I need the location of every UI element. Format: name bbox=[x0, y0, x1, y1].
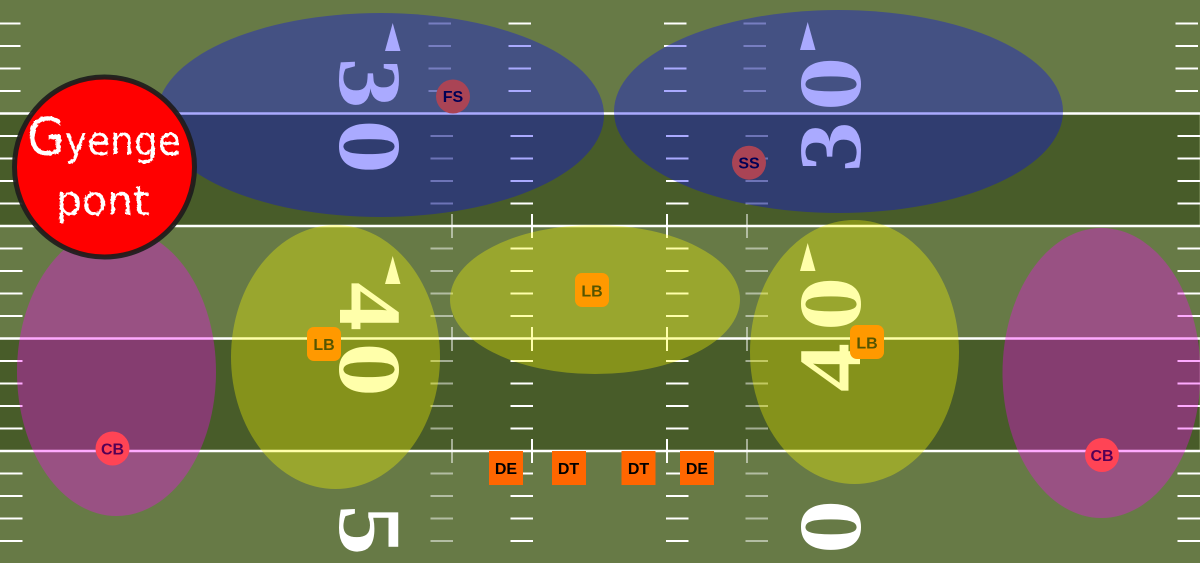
player: LB right bbox=[850, 325, 884, 359]
zone: hook middle bbox=[450, 225, 740, 374]
number: right 30: 3 bbox=[780, 122, 880, 172]
zone: hook left bbox=[231, 225, 440, 489]
player: DE left: DE bbox=[495, 461, 517, 478]
zone: deep left bbox=[157, 13, 604, 217]
zone: flat left bbox=[17, 228, 216, 516]
number: left 40 bbox=[320, 282, 418, 397]
player: LB right: LB bbox=[856, 336, 878, 352]
number: right 50: 0 bbox=[782, 500, 880, 554]
badge text bbox=[27, 107, 181, 225]
number: right 40: 4 bbox=[782, 343, 880, 392]
player: DT right: DT bbox=[628, 461, 649, 478]
player: CB left bbox=[96, 432, 130, 466]
zone: flat right bbox=[1002, 228, 1200, 518]
player: LB left bbox=[307, 327, 341, 361]
number: left 40: 0 bbox=[320, 342, 418, 397]
yard numbers bbox=[320, 57, 880, 555]
player: DT left: DT bbox=[558, 461, 579, 478]
player: SS bbox=[732, 146, 766, 180]
player: LB middle bbox=[575, 273, 609, 307]
player: DE right bbox=[680, 451, 714, 485]
player: FS bbox=[436, 80, 470, 114]
player: DT left bbox=[552, 451, 586, 485]
player: LB left: LB bbox=[313, 337, 335, 354]
player: CB right bbox=[1085, 438, 1119, 472]
defensive line bbox=[489, 451, 714, 485]
number: left 30 bbox=[320, 58, 420, 174]
number: right 30: 0 bbox=[782, 57, 880, 111]
badge text: Gyenge bbox=[27, 107, 181, 167]
zone: hook right bbox=[750, 220, 959, 484]
badge text: pont bbox=[56, 177, 149, 225]
player: FS: FS bbox=[443, 89, 464, 106]
number: left 50: 5 bbox=[320, 505, 420, 555]
player: LB middle: LB bbox=[581, 284, 603, 300]
badge: weak point bbox=[14, 77, 194, 257]
player: DE right: DE bbox=[686, 461, 708, 478]
players bbox=[96, 80, 1119, 472]
number: right 40: 0 bbox=[782, 277, 880, 331]
player: DE left bbox=[489, 451, 523, 485]
player: CB left: CB bbox=[101, 442, 124, 458]
player: CB right: CB bbox=[1090, 448, 1114, 465]
direction arrows bbox=[385, 22, 816, 284]
zone: deep right bbox=[614, 10, 1063, 213]
player: SS: SS bbox=[738, 156, 760, 172]
player: DT right bbox=[622, 451, 656, 485]
field dark bands bbox=[0, 114, 1199, 451]
number: right 40 bbox=[782, 277, 880, 392]
number: left 30: 0 bbox=[320, 120, 418, 174]
number: left 30: 3 bbox=[320, 58, 420, 108]
yard lines bbox=[0, 114, 1200, 451]
number: right 30 bbox=[780, 57, 880, 172]
number: left 40: 4 bbox=[320, 282, 418, 331]
